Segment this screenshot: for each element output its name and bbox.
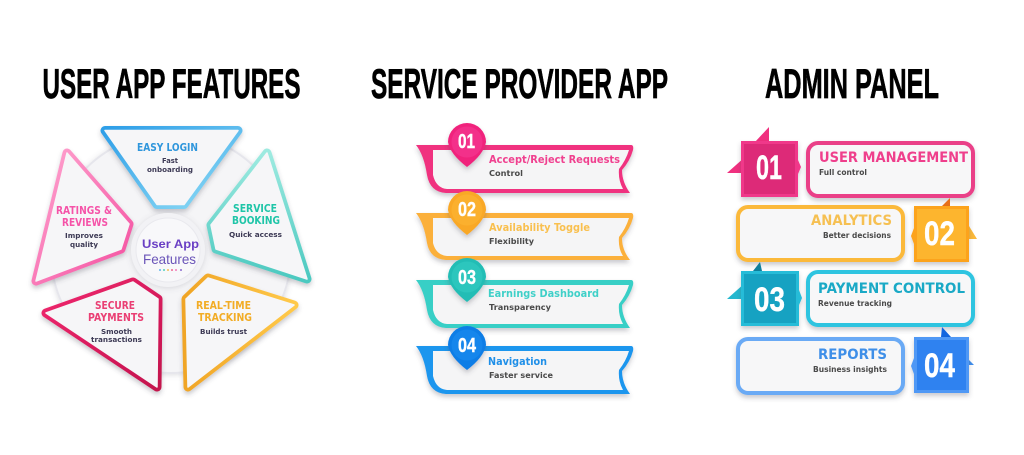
row 04: navigation: Faster service <box>489 371 553 380</box>
segment: easy login: Fast <box>162 157 179 165</box>
segment: real-time tracking: Builds trust <box>200 328 248 336</box>
segment: service booking: BOOKING <box>232 215 280 227</box>
row 03: earnings dashboard <box>416 258 633 328</box>
row 04: reports: REPORTS <box>818 347 887 363</box>
panel: user app features wheel <box>36 130 307 387</box>
row 04: reports: Business insights <box>813 365 888 374</box>
segment: secure payments <box>46 282 158 387</box>
center hub: User App <box>142 237 199 251</box>
row 01: user management: USER MANAGEMENT <box>819 150 968 166</box>
segment: secure payments: PAYMENTS <box>88 312 144 324</box>
row 02: analytics: ANALYTICS <box>811 213 892 229</box>
segment: ratings and reviews: quality <box>70 241 98 249</box>
row 03: payment control: 03 <box>754 281 785 319</box>
segment: ratings and reviews <box>36 153 129 281</box>
segment: ratings and reviews: RATINGS & <box>56 205 112 217</box>
row 01: user management: Full control <box>819 168 867 177</box>
segment: easy login: EASY LOGIN <box>137 142 198 154</box>
row 02: analytics: 02 <box>924 215 955 253</box>
row 04: navigation: Navigation <box>488 356 547 368</box>
center hub: Features <box>143 251 196 267</box>
row 04: reports <box>738 327 974 393</box>
row 03: payment control: PAYMENT CONTROL <box>818 281 965 297</box>
panel: service provider app list <box>416 123 633 394</box>
segment: service booking <box>211 153 307 279</box>
segment: secure payments: transactions <box>91 336 142 344</box>
segment: easy login: onboarding <box>147 166 193 174</box>
title: service provider app: SERVICE PROVIDER APP <box>371 60 668 107</box>
segment: easy login <box>105 130 238 204</box>
row 02: availability toggle: 02 <box>458 199 476 221</box>
row 02: analytics <box>738 198 977 262</box>
row 04: navigation <box>416 326 633 394</box>
row 01: accept/reject requests: 01 <box>458 131 475 153</box>
row 01: accept/reject requests: Accept/Reject Requests <box>489 154 620 166</box>
row 02: analytics: Better decisions <box>823 231 892 240</box>
row 02: availability toggle: Flexibility <box>489 237 534 246</box>
background plate <box>51 133 291 373</box>
row 03: earnings dashboard: 03 <box>458 267 476 289</box>
row 01: user management <box>727 127 973 197</box>
row 03: payment control: Revenue tracking <box>818 299 892 308</box>
row 02: availability toggle <box>416 191 633 260</box>
segment: ratings and reviews: Improves <box>65 232 103 240</box>
panel: admin panel list <box>727 127 977 393</box>
row 01: accept/reject requests: Control <box>489 169 523 178</box>
row 04: reports: 04 <box>924 347 955 385</box>
segment: service booking: Quick access <box>229 231 282 239</box>
row 02: availability toggle: Availability Toggle <box>489 222 590 234</box>
row 04: navigation: 04 <box>458 335 477 357</box>
segment: real-time tracking <box>186 278 294 387</box>
row 01: user management: 01 <box>756 149 782 187</box>
segment: secure payments: SECURE <box>95 300 135 312</box>
center hub <box>131 213 205 287</box>
row 03: payment control <box>727 262 973 326</box>
row 03: earnings dashboard: Earnings Dashboard <box>488 288 599 300</box>
row 03: earnings dashboard: Transparency <box>489 303 551 312</box>
row 01: accept/reject requests <box>416 123 633 193</box>
segment: real-time tracking: TRACKING <box>198 312 252 324</box>
segment: ratings and reviews: REVIEWS <box>62 217 108 229</box>
segment: secure payments: Smooth <box>101 328 132 336</box>
segment: service booking: SERVICE <box>233 203 277 215</box>
segment: real-time tracking: REAL-TIME <box>196 300 251 312</box>
title: user app features: USER APP FEATURES <box>42 60 300 107</box>
